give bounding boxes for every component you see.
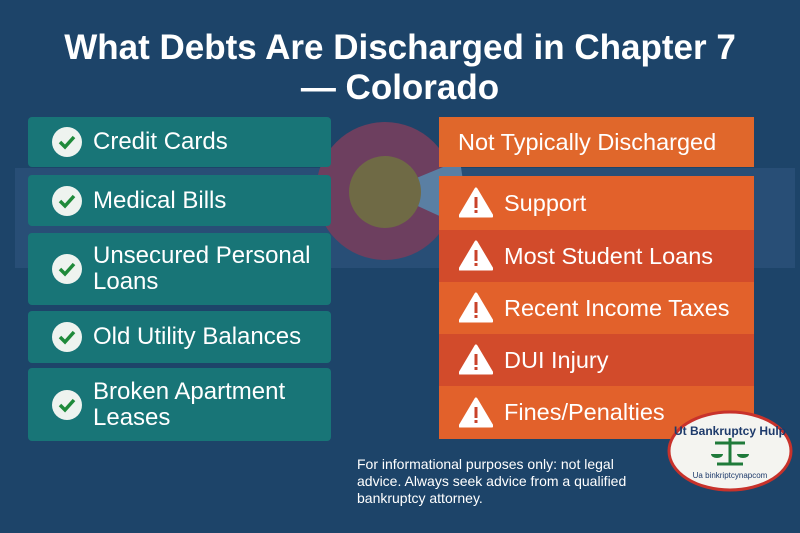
title: — Colorado <box>301 68 499 107</box>
logo badge <box>668 410 792 492</box>
disclaimer text: For informational purposes only: not legal advice. Always seek advice from a qualified bankruptcy attorney. <box>357 456 626 506</box>
header: Not Typically Discharged <box>458 128 716 154</box>
item: leases: Leases <box>93 404 170 430</box>
logo badge: Ut Bankruptcy Hulp <box>674 424 786 438</box>
item: credit cards: Credit Cards <box>93 128 228 155</box>
item: medical bills <box>28 175 331 226</box>
item: student loans <box>439 230 754 282</box>
item: personal loans <box>28 233 331 305</box>
item: taxes <box>439 282 754 334</box>
item: support <box>439 176 754 230</box>
panel: not discharged <box>439 117 754 439</box>
logo badge: Ua binkriptcynapcom <box>693 471 768 480</box>
item: utility: Old Utility Balances <box>93 323 301 350</box>
title: What Debts Are Discharged in Chapter 7 <box>64 28 736 67</box>
item: utility <box>28 311 331 363</box>
item: DUI <box>439 334 754 386</box>
item: credit cards <box>28 117 331 167</box>
item: medical bills: Medical Bills <box>93 186 226 214</box>
header <box>439 117 754 167</box>
item: personal loans: Unsecured Personal <box>93 242 310 269</box>
item: support: Support <box>504 190 586 216</box>
panel: discharged <box>28 117 331 441</box>
item: fines <box>439 386 754 439</box>
item: personal loans: Loans <box>93 268 158 295</box>
item: leases: Broken Apartment <box>93 378 285 404</box>
item: leases <box>28 368 331 441</box>
title <box>64 28 736 107</box>
item: DUI: DUI Injury <box>504 346 608 372</box>
item: student loans: Most Student Loans <box>504 242 713 268</box>
item: taxes: Recent Income Taxes <box>504 294 730 320</box>
item: fines: Fines/Penalties <box>504 399 665 425</box>
